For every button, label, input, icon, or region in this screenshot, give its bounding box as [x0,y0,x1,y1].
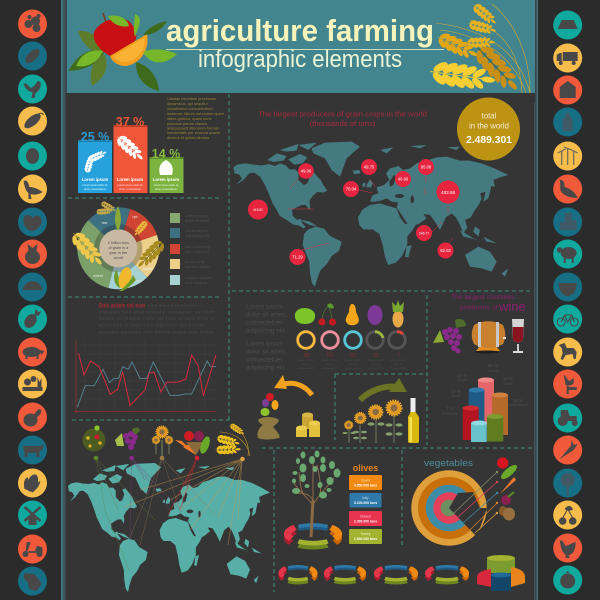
bar: blue 25%: Lorem ipsum [82,177,108,182]
text block: claritas: putamus parum claram, [167,121,208,126]
label: Spain: Spain [361,478,370,482]
heading: The largest countries - [451,294,519,301]
icon: grapes [433,319,466,354]
panel: grain pie chart: year in the [109,251,127,255]
connector lines [288,171,453,251]
icon: cherries [318,303,336,326]
line chart [74,340,216,413]
text block: claritas: humanitatis per seacula quarta [167,130,221,135]
icon: berries [18,10,47,38]
ring chart 1 [281,566,315,583]
text block: Lorem ipsum [246,304,283,310]
panel: header banner [67,0,535,103]
stacked ring chart [477,555,525,591]
cylinder labels [442,363,529,416]
cylinder labels: Dolor [504,382,513,386]
icon: potatoes [499,506,515,520]
icon: carrot [553,436,582,464]
target chart [411,470,487,546]
captions: dolor sit [325,362,335,366]
text block: claritas: Claritas est etiam processus [167,96,216,101]
ring chart 3 [377,566,415,583]
panel: grain pie chart: rye [132,215,138,219]
captions: Lorem ipsum [298,358,315,362]
icon: sheep [553,240,582,268]
percent labels: 35 [373,353,379,359]
icon: milk [553,108,582,136]
legend: dolor sit amet [185,218,210,223]
cylinder labels: 12 % [503,376,513,381]
icon: wine barrel [472,321,506,354]
arrow: olive green [360,378,407,400]
icon: land map [18,566,47,596]
percent labels [303,352,400,359]
captions: Lorem ipsum [390,358,407,362]
icon: sunflowers [152,426,173,456]
pie segment: barley [118,235,159,277]
panel: grain pie chart: 2 billion tons [108,241,129,245]
panel: grain pie chart: of grain in a [108,246,129,250]
icon: coins [296,412,320,437]
label: Italy [350,493,382,508]
icon: goose [18,174,47,204]
icon: cucumber [499,463,519,481]
text block: claritas: lectorum. Mirum est notare quam [167,111,224,116]
captions: consectetuer [322,366,338,370]
captions: Lorem ipsum [322,358,339,362]
heading: olives [353,463,378,473]
bar: green 14%: Lorem ipsum dolor sit [154,183,179,187]
captions: consectetuer [368,366,384,370]
percent labels: 85 [303,353,310,359]
icon: sunflowers [342,400,402,443]
pie segment: wheat [77,220,118,288]
icon: pineapple [392,300,404,328]
icon: apple [295,308,315,324]
chart grid [76,340,216,411]
panel: world map of grain producers: 419.81 [253,208,263,212]
icon: rooster [18,74,47,104]
subtitle: infographic elements [198,46,402,73]
heading: The largest producers of grain crops in the world [258,110,427,118]
percent labels: 65 [350,353,356,359]
ring chart 4 [428,566,466,583]
heading: (thousands of tons) [310,119,376,128]
cylinder labels: 65 % [488,363,498,368]
icon: tomato [497,457,508,469]
icon: pineapple [18,304,47,334]
bar: red 37%: Lorem ipsum [117,177,143,182]
icon: tomato [553,566,582,594]
bar: red 37%: 37 % [116,115,144,129]
icon: scooter [18,534,47,564]
text block: claritas: mutationem consuetudium [167,106,213,111]
label: Turkey [349,529,382,544]
text block: Lorem ipsum [246,340,283,348]
heading [451,294,526,314]
text block: accumsan et iusto odio dignissim qui blandit [98,322,205,328]
text block: claritas: decima et quinta decima [167,135,210,140]
pie segment: rye [118,209,157,248]
panel: world map of grain producers: 95.08 [421,164,432,170]
label: Greece: Greece [360,514,371,518]
icon: wheat on pie [67,227,108,270]
panel: grain pie chart: barley [143,267,153,271]
legend: magna aliquam [185,275,213,280]
donut charts [298,332,405,348]
icon: potato [18,208,47,236]
cylinder labels: 7 % [446,406,454,411]
icon: seed [18,42,47,70]
bar: green 14%: Lorem ipsum [153,177,179,182]
label: Greece: 2.300.000 tons [354,520,377,524]
icon: grapes [115,427,140,450]
panel: world map of grain producers: 71.29 [292,254,303,260]
icon: goose [553,174,582,204]
captions: dolor sit [301,362,311,366]
heading: producers of [460,304,498,312]
text block: claritas: dynamicus, qui sequitur [167,101,209,106]
title: agriculture farming [166,13,434,48]
connector lines [453,472,497,533]
panel: grain pie chart: rice [102,221,107,225]
panel: grain pie chart: corn [134,279,142,283]
panel: world map of grain producers: 82.03 [440,248,451,253]
captions: Lorem ipsum [368,358,385,362]
text block: consectetuer [246,320,283,326]
total callout: total [482,112,497,120]
cylinder labels: 15 % [451,389,461,394]
total callout: 2.489.301 [466,135,512,146]
panel: world map of grain producers: 46.90 [398,176,409,182]
icon: oil bottle [408,398,419,443]
icon: horse [553,338,582,366]
total callout [457,98,520,160]
bar: red 37%: Lorem ipsum dolor sit [118,183,143,187]
heading: wine [498,299,526,314]
pie segment: corn [108,248,147,289]
panel: grain pie chart: world [114,256,123,260]
icon: corn [18,468,47,498]
icon: field [553,10,582,40]
text block: iriure dolor in hendrerit in [147,303,199,308]
icon: cherries [553,500,582,530]
captions: dolor sit [371,362,381,366]
icon: weather vane rooster [553,370,582,398]
text block: claritas: littera gothica, quam nunc [167,116,212,121]
icon: wind turbines [553,142,582,170]
legend: laoreet dolore [185,264,210,269]
icon: olive tree [292,450,340,537]
text block: dolor sit amet, [246,348,286,356]
text block [98,302,215,334]
icon: farm produce [18,370,47,398]
icon: plum [368,305,382,325]
icon: apple and orange with leaves [68,13,177,91]
cylinder labels: Amet [452,394,460,398]
heading [258,110,427,128]
icon: barley on pie [133,236,169,272]
icon: truck [553,44,582,72]
bar: green 14% [150,147,184,193]
legend: consectetuer [185,228,209,233]
icon: beet [501,492,514,505]
panel: world map of grain producers [233,98,520,287]
captions: dolor sit [393,362,403,366]
left sidebar icons [18,10,47,596]
icon: windmill [18,500,47,530]
panel: olives [288,450,382,547]
percent labels: 55 [327,352,333,358]
cylinder chart [463,378,508,442]
text block [246,304,286,372]
icon: eggplant [18,106,47,136]
icon: wheat bundle [215,421,250,456]
captions: consectetuer [390,366,406,370]
ring under tree [288,525,338,547]
icon: hen [553,534,582,562]
panel: world map of grain producers: 246.77 [419,232,429,236]
label: Italy: 3.100.000 tons [354,501,377,505]
text block: dolore eu feugiat nulla facilisis at vero eros et [98,316,215,321]
panel: world map of grain producers: 70.04 [346,186,357,192]
pie segment: rice [88,207,130,248]
text block: claritas: anteposuerit litterarum formas [167,126,219,130]
icon: corn on pie [114,266,136,291]
dashed dividers [68,94,533,592]
icon: bread [18,272,47,302]
heading: vegetables [424,458,473,469]
cylinder labels: Consectetuer [508,403,529,407]
row of ring charts [281,555,525,591]
icon: turkey leg [18,402,47,432]
text block: vulputate velit esse molestie consequat, vel illum [98,310,215,314]
cylinder labels: 10 % [513,398,523,403]
text block: praesent luptatum zzril delenit augue duis dolore [98,330,215,334]
label: Spain: 4.550.000 tons [354,484,377,488]
panel: wine producers [433,294,529,442]
bar: green 14%: 14 % [152,147,180,161]
label: Turkey: 1.800.000 tons [354,537,377,541]
panel: sunflower oil [342,378,419,443]
cylinder labels: 10 % [457,373,467,378]
icon: rye on pie [132,219,150,238]
legend: sed nonummy [185,244,210,249]
legend: tincidunt ut [185,259,205,264]
panel: world map of grain producers: 483.68 [441,190,455,195]
panel: crop origins world map [68,421,270,592]
icon: beet [18,240,47,268]
panel: vegetables [411,457,519,546]
cylinder labels: Lorem [488,369,498,373]
panel: world map of grain producers: 49.06 [301,168,312,174]
panel: grain pie chart [67,199,213,291]
legend: erat volutpat [185,280,208,285]
bar: blue 25% [78,130,112,193]
icon: vegetables [175,431,212,455]
arrow: orange [274,375,312,395]
captions: dolor sit [348,362,358,366]
captions: Lorem ipsum [345,358,362,362]
total callout: in the world [469,122,509,130]
panel: fruit statistics [246,300,407,440]
label: Spain [349,475,382,490]
icon: bicycle [553,304,582,334]
icon: wine glass [512,319,524,353]
world map [233,142,508,287]
icon: farmhouse [553,76,582,104]
label: Turkey: Turkey [360,532,371,536]
bar: green 14%: amet, consectetuer [155,187,177,191]
text block: adipiscing elit. [246,364,286,372]
text block: Duis autem vel eum [98,302,146,310]
panel: world map of grain producers: 49.75 [364,164,375,170]
captions: consectetuer [298,366,314,370]
icon: sack [257,417,280,440]
bar: red 37% [113,115,148,193]
legend: nibh euismod [185,249,209,254]
text block: claritas [167,96,224,140]
captions [298,358,407,370]
cylinder labels: Ipsum [457,378,467,382]
icon: tractor [553,404,582,432]
icon: carrot [500,477,516,494]
icon: fruit pile [260,393,278,416]
text block: consectetuer [246,356,283,364]
panel: percent bars [78,115,184,193]
cylinder labels: Adipiscing [442,412,458,416]
percent labels: 7 [397,353,400,359]
bar: blue 25%: 25 % [81,130,109,144]
world map [68,463,270,592]
legend: Lorem ipsum [185,213,209,218]
bar: red 37%: amet, consectetuer [119,187,141,191]
icon: bowl [553,272,582,302]
label: Greece [349,511,382,526]
right sidebar icons [553,10,582,594]
panel: grain pie chart: wheat [93,274,103,278]
icon: packages [553,208,582,236]
panel: line chart with text [74,302,216,413]
icon: fruit tree [82,425,106,452]
icon: pear [346,304,359,325]
ring chart 2 [327,566,363,583]
icon: rice on pie [96,199,121,231]
icon: tree [553,468,582,498]
legend: adipiscing elit [185,233,210,238]
connector lines [96,458,242,570]
bar: blue 25%: amet, consectetuer [84,187,106,191]
text block: adipiscing elit. [246,328,286,334]
icon: plum [18,142,47,170]
label: Italy: Italy [362,496,369,500]
bar: blue 25%: Lorem ipsum dolor sit [83,183,108,187]
text block: dolor sit amet, [246,312,286,318]
data bubbles [248,159,460,265]
icon: cow [18,436,47,464]
captions: consectetuer [345,366,361,370]
icon: pig [18,338,47,366]
icon: wheat bundle [428,0,535,103]
legend [170,213,213,285]
